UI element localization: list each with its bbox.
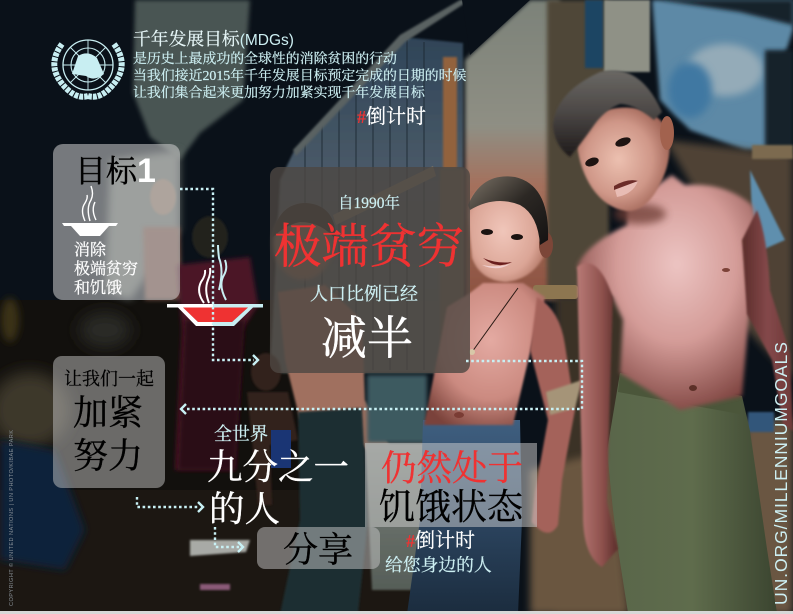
intro text: 让我们集合起来更加努力加紧实现千年发展目标 <box>133 84 426 101</box>
copyright credit: COPYRIGHT © UNITED NATIONS | UN PHOTO/KIBAE PARK <box>8 430 15 606</box>
arrow: one ninth to share <box>215 527 243 552</box>
strengthen: 加紧 <box>73 394 143 433</box>
thatch and debris right <box>665 140 793 380</box>
arrow: work together to one ninth <box>137 497 203 512</box>
bucket <box>367 375 427 443</box>
let us together: 让我们一起 <box>64 369 154 389</box>
panel: goal 1 <box>53 144 180 300</box>
goal 1 description: 极端贫穷 <box>74 259 138 278</box>
goal 1 description: 和饥饿 <box>74 279 122 297</box>
worldwide label: 全世界 <box>214 424 268 444</box>
corrugated metal <box>270 37 463 373</box>
icon: UN emblem <box>54 40 122 97</box>
extreme poverty: 极端贫穷 <box>274 222 464 274</box>
intro heading: 千年发展目标(MDGs) <box>133 28 294 49</box>
halved: 减半 <box>321 313 413 364</box>
arrow: goal panel to halved panel <box>180 189 258 365</box>
left crowd tones <box>0 372 70 448</box>
goal 1 description: 消除 <box>74 241 107 259</box>
blue tarp <box>652 0 793 150</box>
effort: 努力 <box>73 437 143 476</box>
panel: still hungry <box>365 443 537 527</box>
still in: 仍然处于 <box>381 448 523 488</box>
panel: halved statistic <box>270 167 470 373</box>
one ninth: 九分之一 <box>207 447 349 487</box>
panel: share: 分享 <box>283 531 353 570</box>
panel: work together <box>53 356 165 488</box>
left boy <box>273 206 333 280</box>
hashtag countdown top: #倒计时 <box>357 105 426 128</box>
sky wedge <box>133 0 250 160</box>
panel: share <box>257 527 380 570</box>
hashtag countdown bottom: #倒计时 <box>406 529 475 552</box>
middle boy <box>407 420 522 614</box>
intro text: 当我们接近2015年千年发展目标预定完成的日期的时候 <box>133 67 466 84</box>
background figures <box>105 150 180 300</box>
big bowl icon with steam <box>167 245 263 326</box>
to people around you: 给您身边的人 <box>385 555 492 575</box>
arrow: halved panel to work together <box>181 361 582 414</box>
since 1990: 自1990年 <box>338 193 400 212</box>
intro text: 是历史上最成功的全球性的消除贫困的行动 <box>133 50 397 67</box>
icon: bowl with steam <box>62 186 118 236</box>
of people: 的人 <box>209 489 280 529</box>
beams and posts <box>333 166 436 225</box>
hunger state: 饥饿状态 <box>379 487 524 527</box>
goal 1 heading: 目标1 <box>75 152 156 190</box>
vertical URL: UN.ORG/MILLENNIUMGOALS <box>771 342 791 605</box>
proportion text: 人口比例已经 <box>310 284 418 304</box>
right boy <box>607 373 777 613</box>
